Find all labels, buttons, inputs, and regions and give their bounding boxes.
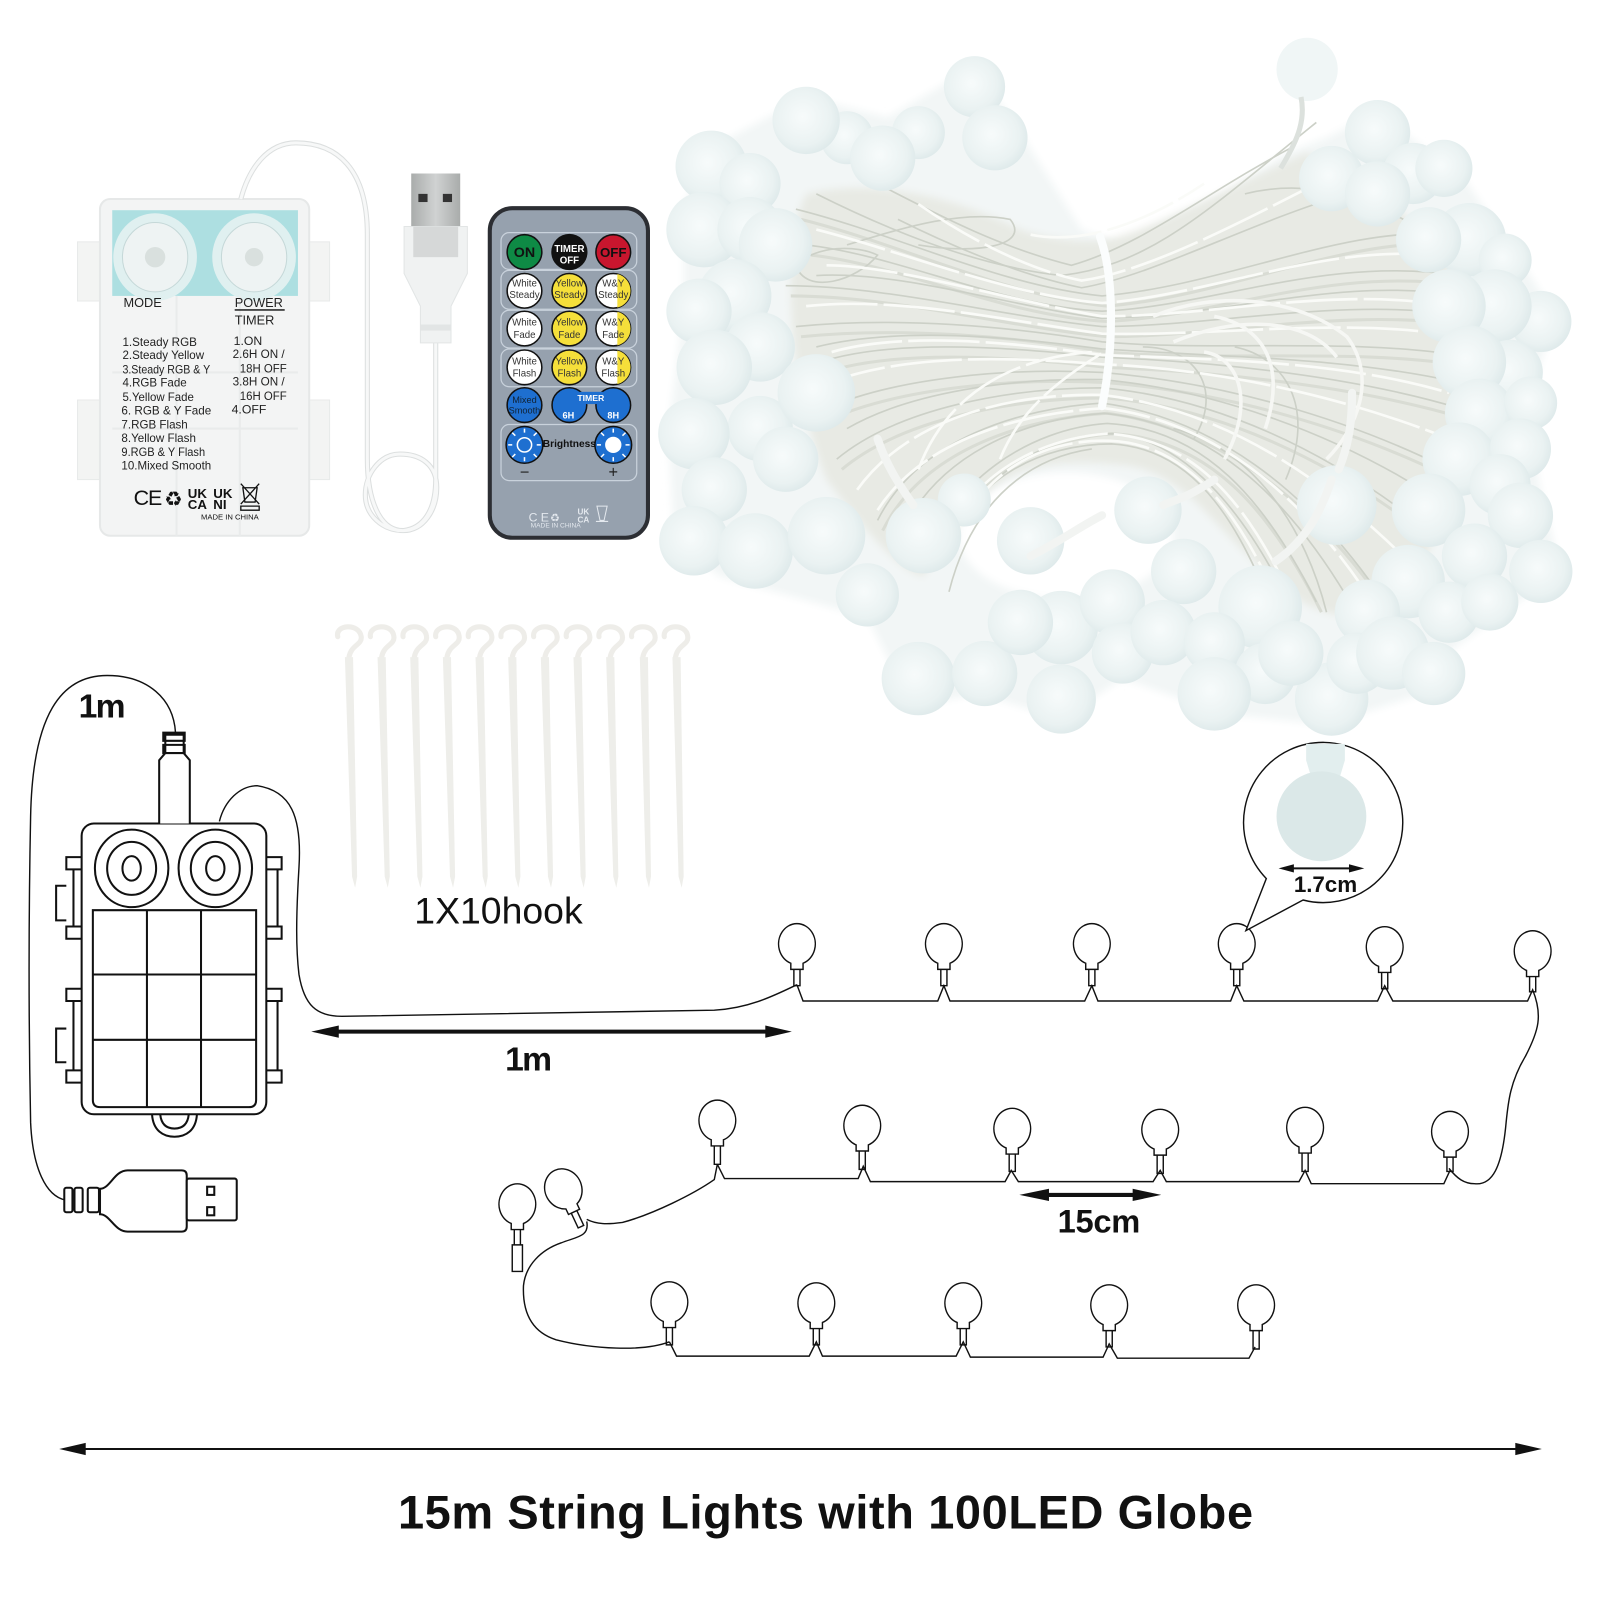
mixed smooth and timer buttons: 8H bbox=[607, 410, 619, 420]
flash row buttons: Flash bbox=[558, 369, 581, 380]
timer list: 2.6H ON / bbox=[233, 347, 285, 361]
dimension arrow: 1m lead bbox=[311, 1026, 792, 1038]
flash row buttons: Yellow bbox=[556, 356, 584, 367]
side tabs bbox=[78, 242, 330, 480]
photo: bundle of globe string lights bbox=[658, 38, 1572, 736]
line drawing: usb wire bbox=[29, 676, 176, 1200]
flash row buttons bbox=[507, 350, 631, 385]
brightness controls bbox=[506, 427, 632, 482]
teal top panel bbox=[112, 210, 298, 296]
knob left bbox=[95, 830, 168, 907]
flash row buttons: Flash bbox=[513, 369, 536, 380]
power row buttons: OFF bbox=[560, 255, 579, 266]
fade row buttons: White bbox=[512, 318, 537, 329]
certification marks bbox=[134, 484, 260, 521]
mode button bbox=[113, 213, 197, 301]
globes bbox=[658, 56, 1572, 736]
certification marks: MADE IN CHINA bbox=[201, 512, 260, 521]
timer list: 16H OFF bbox=[240, 389, 287, 403]
string row 3 bbox=[651, 1282, 1274, 1358]
steady row buttons: Steady bbox=[509, 290, 540, 301]
label: 1m usb: 1m bbox=[79, 688, 126, 725]
string row 1 bbox=[779, 924, 1551, 1184]
fade row buttons: Fade bbox=[513, 330, 536, 341]
silhouette backing bbox=[668, 66, 1561, 724]
callout: bulb detail bbox=[1244, 742, 1403, 931]
line drawing: battery box bbox=[56, 733, 282, 1137]
fade row buttons: W&Y bbox=[602, 318, 625, 329]
central opening bbox=[959, 472, 1173, 599]
steady row buttons: Steady bbox=[598, 290, 628, 301]
mode list: 5.Yellow Fade bbox=[122, 390, 194, 404]
fade row buttons bbox=[507, 311, 631, 346]
steady row buttons: White bbox=[512, 279, 537, 290]
power row buttons: TIMER bbox=[554, 244, 584, 255]
steady row buttons: Yellow bbox=[556, 279, 584, 290]
wire mass bbox=[791, 153, 1461, 615]
fade row buttons: Fade bbox=[558, 330, 580, 341]
mixed smooth and timer buttons bbox=[507, 388, 631, 422]
label: 1m lead: 1m bbox=[505, 1041, 552, 1078]
box seams bbox=[112, 296, 298, 536]
row 3 wire bbox=[669, 1342, 1255, 1358]
power timer labels: POWER bbox=[235, 295, 283, 310]
timer list: 4.OFF bbox=[232, 402, 266, 416]
steady row buttons: W&Y bbox=[602, 279, 625, 290]
mode list: 8.Yellow Flash bbox=[121, 431, 196, 445]
usb cable bbox=[241, 143, 437, 531]
certification marks: UK bbox=[213, 486, 233, 501]
usb plug bbox=[404, 173, 467, 343]
dimension arrow: total length bbox=[59, 1443, 1542, 1455]
neck and connector bbox=[159, 733, 190, 823]
mode list: 6. RGB & Y Fade bbox=[121, 403, 211, 417]
mixed smooth and timer buttons: Mixed bbox=[512, 395, 537, 405]
power row buttons bbox=[507, 235, 631, 269]
power timer labels bbox=[235, 295, 285, 327]
product photo: battery box with USB cable bbox=[78, 143, 467, 536]
hook set bbox=[337, 627, 688, 657]
mode list: 3.Steady RGB & Y bbox=[122, 362, 210, 376]
wire strands dark bbox=[786, 122, 1469, 612]
detail label: 1.7cm bbox=[1294, 872, 1357, 897]
hook stems bbox=[345, 657, 684, 888]
power button bbox=[212, 213, 296, 301]
brightness controls: + bbox=[608, 464, 618, 482]
remote marks: C E bbox=[529, 510, 549, 524]
wire strands light bbox=[806, 179, 1459, 597]
string row 2 bbox=[587, 1100, 1468, 1224]
bottom loop bbox=[152, 1114, 197, 1137]
title: 15m String Lights with 100LED Globe bbox=[398, 1487, 1253, 1539]
remote marks: UK bbox=[578, 507, 589, 516]
mixed smooth and timer buttons: TIMER bbox=[577, 393, 605, 403]
steady row buttons bbox=[507, 273, 631, 308]
clear looping strands bbox=[1153, 301, 1362, 459]
mixed smooth and timer buttons: Smooth bbox=[509, 405, 540, 415]
hook quantity label: 1X10hook bbox=[414, 890, 583, 931]
brightness controls: Brightness bbox=[543, 439, 596, 450]
fade row buttons: Fade bbox=[602, 330, 624, 341]
row 1 bulbs bbox=[779, 924, 1551, 992]
mode list bbox=[121, 335, 211, 472]
label: 15cm spacing: 15cm bbox=[1058, 1203, 1140, 1240]
line drawing: usb plug bbox=[64, 1170, 237, 1232]
remote marks: MADE IN CHINA bbox=[531, 523, 581, 530]
power timer labels: TIMER bbox=[235, 312, 274, 327]
flash row buttons: Flash bbox=[601, 369, 625, 380]
timer list bbox=[232, 334, 287, 416]
certification marks: NI bbox=[213, 497, 227, 512]
timer list: 3.8H ON / bbox=[233, 375, 285, 389]
row 3 bulbs bbox=[651, 1282, 1274, 1349]
timer list: 18H OFF bbox=[240, 361, 287, 375]
row 1 wire bbox=[797, 985, 1538, 1184]
mode list: 7.RGB Flash bbox=[121, 418, 188, 432]
battery box body bbox=[100, 199, 309, 536]
hooks bbox=[337, 627, 688, 888]
brightness controls: − bbox=[520, 464, 529, 482]
white cable tie bbox=[1100, 237, 1111, 406]
remote marks bbox=[529, 506, 608, 530]
remote body bbox=[490, 208, 648, 538]
remote marks: CA bbox=[578, 515, 589, 524]
timer list: 1.ON bbox=[234, 334, 262, 348]
steady row buttons: Steady bbox=[554, 290, 585, 301]
top lone globe bbox=[1277, 38, 1338, 168]
flash row buttons: W&Y bbox=[602, 356, 625, 367]
row 2 bulbs bbox=[699, 1100, 1468, 1173]
tabs bbox=[56, 857, 282, 1083]
globe stems bbox=[878, 393, 1352, 561]
mode list: 4.RGB Fade bbox=[122, 376, 187, 390]
fade row buttons: Yellow bbox=[556, 318, 584, 329]
knob right bbox=[179, 830, 252, 907]
certification marks: CA bbox=[188, 497, 207, 512]
certification marks: ♻ bbox=[164, 489, 183, 511]
button group outlines bbox=[501, 233, 637, 481]
callout outline bbox=[1244, 742, 1403, 931]
remote marks: ♻ bbox=[550, 512, 560, 524]
mode list: 2.Steady Yellow bbox=[122, 348, 204, 362]
detail arrow bbox=[1279, 864, 1364, 872]
mode list: 9.RGB & Y Flash bbox=[121, 445, 205, 459]
power row buttons: OFF bbox=[600, 245, 627, 260]
battery grid bbox=[93, 910, 256, 1107]
detail globe bbox=[1277, 771, 1366, 861]
power row buttons: ON bbox=[514, 245, 535, 261]
certification marks: CE bbox=[134, 486, 162, 510]
certification marks: UK bbox=[188, 486, 207, 501]
mode list: 1.Steady RGB bbox=[122, 335, 197, 349]
remote control bbox=[490, 208, 648, 538]
mixed smooth and timer buttons: 6H bbox=[563, 410, 574, 420]
wire strands soft bbox=[791, 219, 1474, 612]
flash row buttons: White bbox=[512, 356, 537, 367]
end bulbs bbox=[499, 1163, 669, 1348]
body bbox=[82, 823, 266, 1114]
line drawing: lead wire bbox=[219, 786, 797, 1016]
detail neck bbox=[1306, 744, 1345, 781]
mode labels: MODE bbox=[123, 295, 162, 310]
dimension arrow: 15cm spacing bbox=[1019, 1189, 1161, 1201]
mode list: 10.Mixed Smooth bbox=[121, 458, 211, 472]
row 2 wire bbox=[587, 1164, 1450, 1224]
